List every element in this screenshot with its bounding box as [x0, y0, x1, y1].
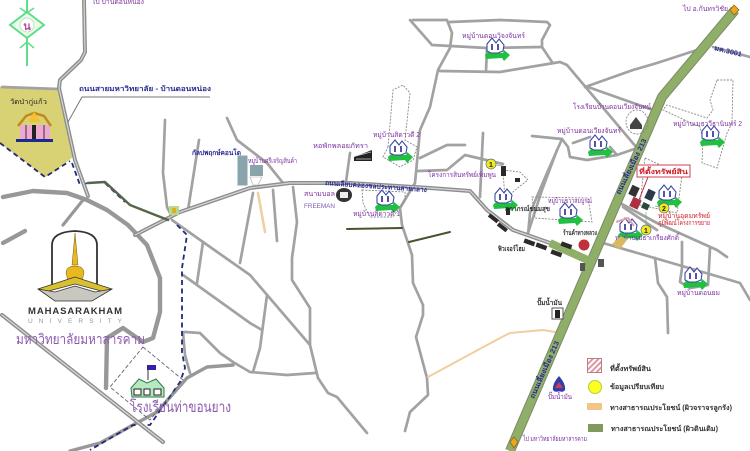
village and place labels: หมู่บ้านดอนวิจงจันทร์: [462, 32, 525, 40]
legend text: comparable: ข้อมูลเปรียบเทียบ: [610, 382, 665, 392]
comparable markers: 2: [662, 206, 666, 213]
comparable markers: 1: [644, 228, 648, 235]
village and place labels: สุภาภรณ์ขนมสุข: [505, 204, 550, 213]
legend text: property: ที่ตั้งทรัพย์สิน: [610, 362, 651, 373]
village outlines: [362, 80, 733, 222]
legend text: laterite road: ทางสาธารณประโยชน์ (ผิวจราจรลูกรัง): [610, 403, 732, 413]
highway 213: [510, 10, 735, 451]
village and place labels: หมู่บ้านขวาสมบูรณ์: [548, 197, 592, 205]
boundary dashes: [0, 143, 187, 450]
sign: junction marker: [169, 206, 179, 215]
icon: gas station: [552, 308, 563, 319]
village and place labels: ไป อ.กันทรวิชัย: [682, 4, 728, 13]
icon: school east: [630, 117, 642, 129]
label: wat: วัดป่ากู่แก้ว: [10, 98, 47, 106]
road label: main road: ถนนเลียบคลองชลประทานสายกลาง: [325, 179, 428, 194]
temple ground: Wat Pa Ku Kaeo: [0, 87, 73, 177]
village and place labels: หมู่บ้านดอนยม: [677, 289, 720, 297]
label: dormitory: หอพักพลอยภัทรา: [313, 142, 368, 150]
legend text: earth road: ทางสาธารณประโยชน์ (ผิวดินเดิม): [611, 424, 718, 433]
village and place labels: หมู่บ้านเมธาเกรียงศักดิ์: [615, 232, 680, 242]
school lot dashed outline: [110, 347, 183, 420]
label: comparable property village: หมู่บ้านอุดมทรัพย์: [658, 212, 710, 220]
village and place labels: หมู่บ้านเมธาวีธานินทร์ 2: [673, 120, 742, 128]
village and place labels: [353, 4, 742, 443]
icon: red shop sign: [578, 240, 590, 250]
callout: property location: ที่ตั้งทรัพย์สิน: [639, 165, 688, 176]
legend swatch: earth road: [588, 424, 603, 432]
village and place labels: ปั๊มน้ำมัน: [548, 390, 572, 401]
icon: PTT station: [553, 376, 565, 392]
direction markers: [510, 5, 739, 448]
label: Mahasarakham University: มหาวิทยาลัยมหาสารคาม: [16, 331, 145, 347]
callout: property location: [637, 165, 690, 205]
rotated highway and route labels: มค.3001: [714, 45, 742, 59]
label: comparable property village: [658, 212, 710, 227]
village and place labels: ฟิวเจอร์โฮม: [497, 244, 525, 253]
village and place labels: หมู่บ้านสิดาวดี 1: [353, 210, 400, 218]
icon: football field: [336, 188, 352, 202]
legend swatch: laterite road: [587, 403, 602, 410]
village and place labels: ไป มหาวิทยาลัยมหาสารคาม: [522, 434, 587, 443]
label: condo: กัลปพฤกษ์คอนโด: [192, 148, 241, 157]
village and place labels: หมู่บ้านดอนเวียงจันทร์: [557, 127, 621, 135]
village and place labels: โครงการสินทรัพย์เพิ่มพูน: [428, 170, 496, 179]
village and place labels: ร้านค้าทางหลวง: [563, 228, 597, 237]
village and place labels: ปั๊มน้ำมัน: [537, 296, 562, 307]
rotated highway and route labels: ถนนเลี่ยงเมือง 213: [527, 339, 561, 400]
icon: dormitory: [354, 150, 372, 161]
label: football field: สนามบอล: [304, 191, 335, 198]
label: Tha Khon Yang school: โรงเรียนท่าขอนยาง: [130, 398, 231, 416]
north compass: [10, 0, 44, 66]
double-line roads: [2, 0, 550, 442]
road label: university - Ban Don Nong: ถนนสายมหาวิทยาลัย - บ้านดอนหน่อง: [79, 84, 212, 93]
rotated highway and route labels: [527, 45, 742, 400]
unpaved and laterite public ways: [88, 182, 555, 377]
label: Si Charoen village: หมู่บ้านศรีเจริญสินค้า: [248, 157, 297, 165]
callout line for road name: [68, 97, 210, 122]
village and place labels: โรงเรียนบ้านดอนเวียงจันทน์: [573, 102, 651, 111]
label: comparable property village: ภูมิพัฒน์โครงการขยาย: [658, 218, 710, 227]
north compass: น: [23, 21, 31, 33]
legend swatch: property: [588, 358, 602, 372]
dark buildings along road: [488, 166, 604, 271]
village and place labels: หมู่บ้านสิดาวดี 2: [373, 131, 420, 139]
comparable markers: [486, 159, 669, 235]
icon: school: [131, 365, 164, 397]
rotated highway and route labels: ถนนเลี่ยงเมือง 213: [613, 137, 649, 196]
legend: [587, 358, 732, 433]
subject property buildings: [612, 185, 656, 249]
legend swatch: comparable: [588, 380, 602, 394]
university name: MAHASARAKHAM: [28, 306, 122, 317]
comparable markers: 1: [489, 162, 493, 169]
university subtitle: UNIVERSITY: [28, 318, 123, 325]
condo building: [237, 155, 263, 186]
icon: temple: [16, 112, 53, 142]
label: FREEMAN: FREEMAN: [304, 203, 335, 210]
university logo: [38, 231, 112, 301]
university ring road: [3, 191, 233, 451]
village icons: [375, 38, 725, 290]
